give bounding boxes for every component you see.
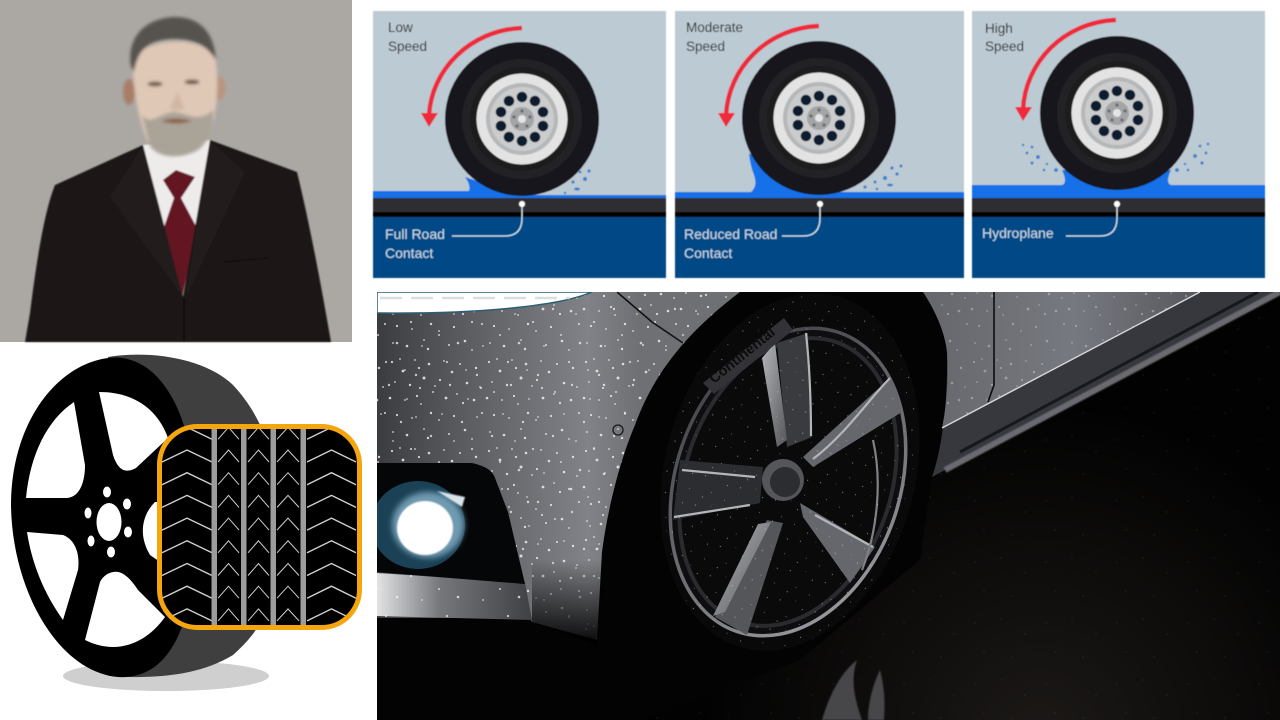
callout: full road contact: [452, 204, 522, 236]
label: low speed: Low: [388, 20, 413, 35]
wet ground: [820, 518, 1261, 720]
ground shadow: [63, 661, 269, 691]
diagram: moderate speed panel: [675, 11, 964, 278]
tyre: [1040, 36, 1194, 190]
hub cap: [762, 459, 804, 501]
headlight: [377, 292, 592, 313]
wheel spokes: [777, 333, 812, 447]
road surface: [972, 198, 1265, 212]
spray droplets: [1022, 143, 1209, 172]
diagram: moderate speed panel: Contact: [684, 245, 732, 261]
diagram: moderate speed panel: Speed: [686, 39, 725, 54]
tyre: [664, 296, 914, 650]
wheel spoke gaps: [26, 392, 168, 647]
nose shadow: [170, 92, 184, 110]
car rear body and sill: [923, 292, 1280, 477]
eyes: [148, 82, 162, 86]
jacket lapels: [110, 141, 245, 297]
tread close-up panel: [160, 426, 360, 628]
reflection on wet road: [822, 660, 885, 720]
water layer: [373, 177, 666, 198]
diagram: high speed panel: Hydroplane: [982, 225, 1054, 241]
label: high speed: High: [985, 21, 1013, 36]
tyre: [742, 41, 896, 195]
tyre side wall: [108, 355, 270, 677]
road surface: [675, 198, 964, 212]
door seam: [988, 292, 994, 402]
bonnet seam: [617, 292, 683, 343]
ears: [123, 79, 135, 105]
red direction arrow: [429, 28, 522, 116]
beard: [142, 110, 213, 156]
label: moderate speed: Moderate: [686, 20, 743, 35]
bumper lower lip: [377, 573, 532, 620]
fog lamp housing: [371, 463, 525, 584]
tyre: [445, 42, 599, 196]
diagram: low speed panel: Speed: [388, 39, 427, 54]
road surface: [373, 198, 666, 212]
diagram: moderate speed panel: Reduced Road: [684, 226, 777, 242]
car front body panel: [377, 292, 740, 645]
head: [123, 17, 226, 156]
wheel face: [11, 358, 197, 677]
alloy rim: [668, 326, 908, 638]
callout: reduced road contact: [782, 204, 820, 236]
diagram: high speed panel: [972, 11, 1265, 278]
shirt collar: [143, 140, 210, 230]
water layer: [972, 170, 1265, 198]
water layer: [675, 153, 964, 198]
sidewall brand label: Continental: [706, 324, 778, 387]
photo: portrait of a man in a dark suit: [0, 0, 352, 342]
sidewall brand label: [703, 318, 793, 394]
sill crease: [942, 292, 1200, 428]
suit jacket: [25, 140, 331, 342]
spray droplets: [564, 169, 591, 194]
diagram: low speed panel: Contact: [385, 245, 433, 261]
water specks on rim: [672, 328, 905, 631]
neck: [146, 125, 208, 160]
red direction arrow: [1023, 20, 1116, 110]
face: [133, 42, 217, 153]
diagram: high speed panel: Speed: [985, 39, 1024, 54]
red direction arrow: [726, 26, 819, 116]
hair: [130, 17, 216, 72]
spray droplets: [863, 164, 902, 190]
diagram: low speed panel: [373, 11, 666, 278]
callout: hydroplane: [1066, 204, 1117, 236]
lower body shade: [532, 564, 601, 640]
necktie: [163, 170, 197, 296]
icon: alloy wheel with tyre tread close-up: [11, 355, 360, 691]
diagram: low speed panel: Full Road: [385, 226, 445, 242]
photo: wet car wheel close-up: [371, 264, 1280, 720]
